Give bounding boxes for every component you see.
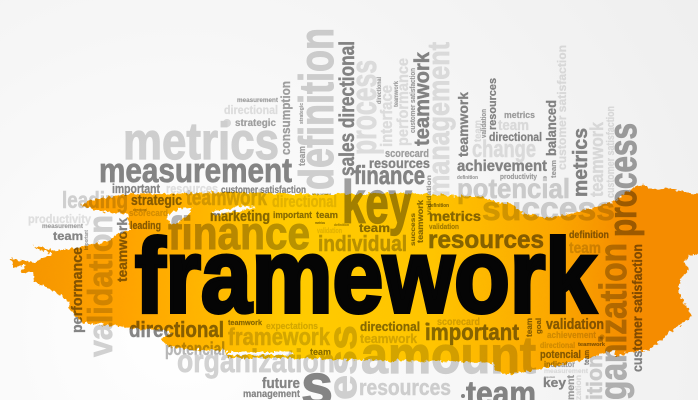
word cloud: lower left words: framework: [228, 324, 331, 351]
word cloud: words on the stroke, top row: success: [411, 212, 417, 246]
word cloud: lower left words: [129, 317, 365, 400]
word cloud: words on the stroke, top row: important: [312, 192, 331, 196]
word cloud: left words: leading: [62, 187, 128, 213]
word cloud: lower right words: directional: [360, 319, 420, 334]
main word: framework: framework: [135, 218, 597, 335]
word cloud: lower right words: validation: [546, 316, 604, 333]
word cloud: left words: team: [53, 229, 83, 243]
word cloud: upper right words: achievement: [457, 158, 548, 175]
word cloud: lower right words: goal: [536, 318, 543, 334]
word cloud: lower right words: potencial: [540, 349, 581, 361]
word cloud: upper left words: measurement: [237, 98, 278, 104]
word cloud: words on the stroke, top row: validation: [429, 224, 459, 231]
word cloud: left words: directional: [133, 207, 147, 212]
orange paint brush stroke: [10, 185, 698, 375]
word cloud: left words: productivity: [28, 212, 91, 226]
word cloud: upper right words: validation: [481, 109, 488, 138]
word cloud: lower left words: organization: [177, 343, 335, 379]
word cloud: upper middle words: directional: [377, 77, 383, 104]
word cloud: lower right words: resources: [359, 375, 451, 400]
word cloud: upper middle words: validation: [427, 175, 433, 215]
word cloud: words on the stroke, top row: definition: [334, 222, 349, 227]
word cloud: left words: scorecard: [129, 208, 168, 218]
word cloud: words on the stroke, top row: metrics: [315, 220, 326, 225]
word cloud: words on the stroke, top row: resources: [428, 226, 544, 254]
word cloud: upper left words: measurement: [99, 152, 292, 190]
word cloud: upper right words: directional: [489, 130, 542, 144]
word cloud: lower right words: indicator: [544, 360, 575, 369]
word cloud: upper middle words: customer satisfaction: [410, 68, 417, 133]
word cloud: words on the stroke, top row: [168, 169, 645, 400]
word cloud: lower right words: directional: [540, 341, 575, 350]
word cloud: upper middle words: process: [343, 60, 384, 155]
word cloud: words on the stroke, top row: definition: [428, 203, 449, 209]
word cloud: words on the stroke, top row: important: [273, 210, 312, 220]
word cloud: lower right words: amount: [361, 327, 536, 385]
word cloud: lower left words: directional: [129, 317, 224, 342]
word cloud: lower left words: management: [243, 389, 301, 400]
word cloud: lower right words: team: [584, 350, 591, 365]
word cloud: left words: teamwork: [186, 185, 268, 210]
word cloud: upper right words: resources: [487, 78, 499, 130]
word cloud: left words: strategic: [131, 192, 182, 209]
word cloud: words on the stroke, top row: key: [342, 169, 412, 236]
word cloud: upper right words: metrics: [504, 110, 535, 120]
word cloud: upper right words: customer satisfaction: [605, 106, 617, 198]
word cloud: upper right words: teamwork: [587, 121, 607, 197]
word cloud: lower right words: scorecard: [437, 317, 480, 328]
word cloud: lower right words: achievement: [547, 330, 596, 340]
word cloud: lower right words: teamwork: [578, 342, 605, 348]
word cloud: upper middle words: scorecard: [385, 148, 429, 160]
word cloud: upper left words: important: [112, 181, 161, 196]
word cloud: left words: validation: [82, 215, 120, 357]
word cloud: upper left words: metrics: [123, 113, 279, 171]
word cloud: upper middle words: [343, 42, 456, 215]
word cloud: left words: directional: [272, 192, 337, 211]
word cloud: left words: important: [84, 230, 90, 250]
word cloud: upper right words: metrics: [570, 128, 592, 197]
word cloud: lower right words: ition: [582, 355, 607, 400]
word cloud: words on the stroke, top row: definition: [569, 230, 609, 241]
word cloud: upper right words: definition: [457, 175, 478, 181]
word cloud: upper middle words: resources: [369, 155, 430, 171]
word cloud: words on the stroke, top row: individual: [318, 231, 407, 256]
word cloud: words on the stroke, top row: validation: [317, 228, 342, 235]
word cloud: upper middle words: finance: [354, 160, 425, 190]
word cloud: upper left words: directional: [224, 103, 278, 117]
word cloud: upper left words: resources: [166, 181, 218, 196]
word cloud: upper left words: [99, 28, 359, 196]
word cloud: upper right words: team: [473, 120, 484, 142]
word cloud: lower right words: team: [525, 318, 534, 337]
word cloud: lower left words: teamwork: [228, 320, 262, 327]
word cloud: lower left words: potencial: [165, 339, 225, 359]
word cloud: words on the stroke, top row: ganization: [593, 243, 635, 400]
word cloud: lower left words: team: [310, 347, 331, 357]
word cloud: words on the stroke, top row: team: [359, 221, 390, 235]
word cloud: lower right words: important: [544, 375, 555, 379]
word cloud: words on the stroke, top row: metrics: [429, 208, 481, 224]
word cloud: lower left words: future: [262, 375, 300, 392]
word cloud: upper right words: team: [551, 160, 558, 178]
word cloud: upper right words: balanced: [543, 100, 559, 156]
word cloud: lower right words: teamwork: [360, 331, 418, 346]
word cloud: words on the stroke, top row: team: [569, 240, 601, 257]
word cloud: upper left words: team: [297, 146, 307, 166]
word cloud: words on the stroke, top row: team: [316, 210, 338, 220]
word cloud: left words: teamwork: [114, 218, 130, 282]
word cloud: upper middle words: management: [421, 42, 456, 197]
word cloud: lower right words: key: [543, 375, 567, 390]
word cloud: upper left words: strategic: [299, 103, 305, 124]
word cloud: upper right words: customer satisfaction: [555, 45, 569, 170]
word cloud: upper left words: sales directional: [336, 41, 359, 176]
word cloud: words on the stroke, top row: finance: [168, 207, 310, 259]
word cloud: upper right words: [455, 45, 645, 237]
word cloud: lower right words: measurement: [544, 369, 588, 375]
word cloud: words on the stroke, top row: marketing: [210, 208, 270, 225]
word cloud: left words: measurement: [42, 224, 83, 230]
word cloud: upper right words: potencial: [457, 173, 570, 204]
word cloud: lower left words: expectations: [266, 321, 318, 331]
word cloud: words on the stroke, top row: teamwork: [416, 199, 425, 243]
word cloud: lower right words: [359, 316, 607, 400]
word cloud: lower right words: important: [425, 319, 519, 345]
word cloud: upper right words: productivity: [500, 174, 537, 181]
word cloud: lower right words: zation: [574, 375, 583, 400]
word cloud: left words: performance: [69, 247, 86, 333]
word cloud: lower right words: ment: [566, 374, 577, 400]
word cloud: upper right words: team: [498, 117, 529, 134]
word cloud: upper middle words: teamwork: [394, 80, 400, 107]
word cloud: upper left words: consumption: [278, 81, 293, 155]
word cloud: upper right words: change: [472, 136, 536, 163]
word cloud: words on the stroke, top row: customer satisfaction: [629, 244, 645, 372]
word cloud: upper left words: customer satisfaction: [221, 185, 306, 196]
word cloud: upper left words: strategic: [235, 118, 276, 129]
word cloud: words on the stroke, top row: success: [482, 190, 615, 227]
word cloud: upper middle words: teamwork: [411, 52, 434, 146]
word cloud: left words: leading: [130, 220, 161, 232]
word cloud: upper middle words: performance: [395, 58, 412, 146]
word cloud: left words: [28, 185, 337, 357]
word cloud: lower left words: ess: [321, 325, 365, 400]
word cloud: upper right words: process: [602, 123, 645, 237]
word cloud: upper middle words: interface: [377, 85, 396, 147]
word cloud: upper right words: teamwork: [455, 92, 471, 157]
